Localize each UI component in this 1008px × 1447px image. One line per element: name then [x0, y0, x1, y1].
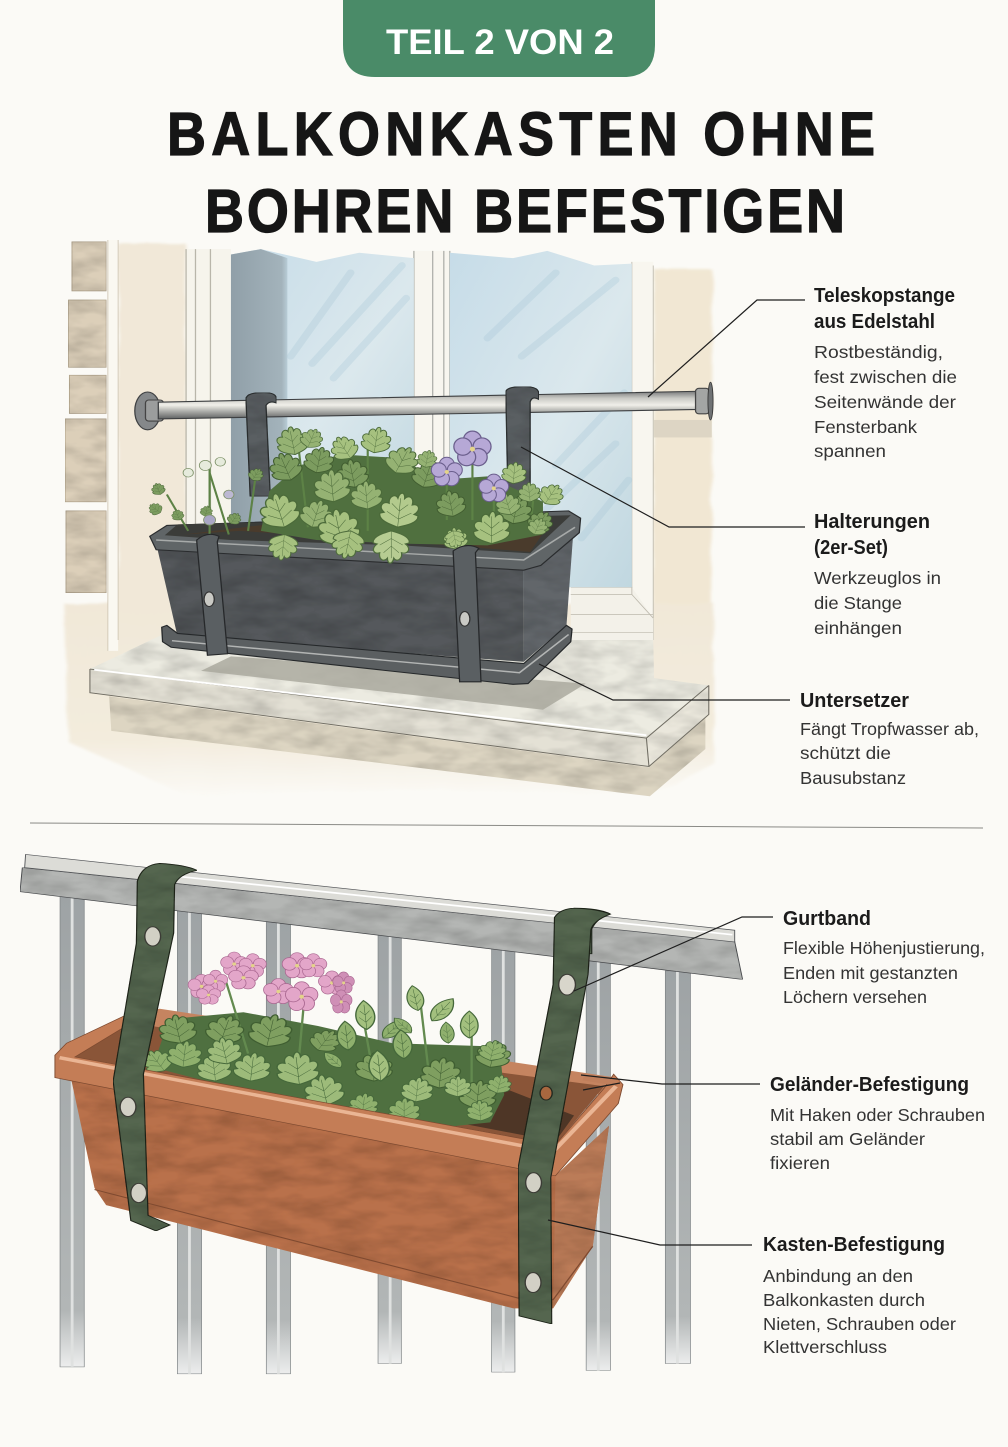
label: Teleskopstange: spannen: [814, 441, 886, 461]
label: Untersetzer: Fängt Tropfwasser ab,: [800, 719, 979, 739]
label: Teleskopstange: [814, 285, 957, 461]
label: Gurtband: Löchern versehen: [783, 987, 927, 1007]
bracket: front straps with rivets: [197, 534, 481, 682]
title: BALKONKASTEN OHNE: [167, 101, 875, 169]
label: Halterungen: Werkzeuglos in: [814, 568, 941, 588]
telescopic rod: [135, 382, 713, 430]
title: [167, 101, 875, 246]
label: Teleskopstange: Teleskopstange: [814, 285, 955, 307]
bracket: back straps on the rod: [246, 387, 539, 496]
label: Teleskopstange: aus Edelstahl: [814, 311, 935, 333]
terracotta planter: [71, 1009, 616, 1308]
label: Kasten-Befestigung: Klettverschluss: [763, 1337, 887, 1357]
leader lines: [521, 300, 805, 1245]
label: Geländer-Befestigung: fixieren: [770, 1153, 830, 1173]
label: Kasten-Befestigung: Kasten-Befestigung: [763, 1234, 945, 1256]
illustration: balcony railing with terracotta planter: [20, 854, 743, 1374]
wall wash: [64, 244, 714, 796]
stone sill: [90, 635, 709, 796]
label: Teleskopstange: fest zwischen die: [814, 367, 957, 387]
label: Untersetzer: [800, 690, 979, 788]
glass panes: [231, 249, 632, 587]
label: Untersetzer: schützt die: [800, 743, 891, 763]
planter: [150, 511, 581, 662]
label: Halterungen: [814, 511, 941, 638]
label: Kasten-Befestigung: Anbindung an den: [763, 1266, 913, 1286]
label: Gurtband: [783, 908, 985, 1007]
planter rim: [55, 1016, 623, 1176]
badge: Teil 2 von 2: TEIL 2 VON 2: [386, 23, 614, 62]
railing bars: [60, 895, 690, 1374]
label: Kasten-Befestigung: Nieten, Schrauben oder: [763, 1314, 956, 1334]
strap: right: [518, 908, 610, 1324]
label: Geländer-Befestigung: Geländer-Befestigung: [770, 1074, 969, 1096]
strap: left: [113, 863, 197, 1231]
label: Halterungen: Halterungen: [814, 511, 930, 533]
right strap back loop: [569, 908, 610, 954]
saucer: [162, 625, 572, 684]
label: Kasten-Befestigung: Balkonkasten durch: [763, 1290, 925, 1310]
label: Gurtband: Enden mit gestanzten: [783, 963, 958, 983]
label: Halterungen: die Stange: [814, 593, 902, 613]
window frame: [186, 249, 653, 640]
flowers: [431, 431, 509, 502]
illustration: window sill with telescopic rod planter: [64, 240, 714, 796]
label: Gurtband: Gurtband: [783, 908, 871, 930]
plants: [146, 425, 568, 551]
label: Gurtband: Flexible Höhenjustierung,: [783, 938, 985, 958]
pink flowers: [188, 952, 354, 1013]
label: Halterungen: (2er-Set): [814, 537, 888, 559]
bricks: [65, 242, 106, 593]
label: Untersetzer: Untersetzer: [800, 690, 909, 712]
label: Geländer-Befestigung: Mit Haken oder Schrauben: [770, 1105, 985, 1125]
label: Teleskopstange: Fensterbank: [814, 417, 917, 437]
railing top: [20, 854, 743, 979]
label: Teleskopstange: Seitenwände der: [814, 392, 956, 412]
label: Geländer-Befestigung: [770, 1074, 985, 1173]
label: Kasten-Befestigung: [763, 1234, 956, 1357]
hanging front leaves: [267, 529, 466, 563]
plants: [137, 978, 513, 1128]
label: Teleskopstange: Rostbeständig,: [814, 342, 943, 362]
badge: Teil 2 von 2: [343, 0, 655, 77]
divider: [30, 823, 983, 828]
label: Untersetzer: Bausubstanz: [800, 768, 906, 788]
label: Geländer-Befestigung: stabil am Geländer: [770, 1129, 925, 1149]
title: BOHREN BEFESTIGEN: [205, 178, 845, 246]
label: Halterungen: einhängen: [814, 618, 902, 638]
